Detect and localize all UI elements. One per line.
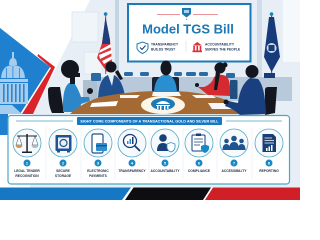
component 3: electronic payments: [84, 129, 112, 178]
component 2: secure storage: 2: [62, 160, 65, 166]
title: Model TGS Bill: [142, 22, 234, 36]
red chevron stripe: [22, 54, 55, 114]
component 5: accountability: ACCOUNTABILITY: [150, 169, 180, 173]
American flag: [97, 12, 112, 74]
component 1: legal tender recognition: [13, 129, 41, 178]
component 6: compliance: [185, 129, 213, 173]
component 5: accountability: 5: [164, 160, 167, 166]
accountability item: ACCOUNTABILITY: [205, 43, 235, 47]
component 4: transparency: [118, 129, 146, 173]
component 1: legal tender recognition: 1: [26, 160, 29, 166]
person: man in navy, left: [98, 62, 125, 102]
component 8: reporting: 8: [268, 160, 271, 166]
component 2: secure storage: STORAGE: [55, 174, 72, 178]
components panel: [8, 116, 290, 184]
component 7: accessibility: 7: [233, 160, 236, 166]
component 2: secure storage: [49, 129, 77, 178]
transparency item: BUILDS TRUST: [151, 48, 175, 52]
component 7: accessibility: [220, 129, 248, 173]
panel heading: EIGHT CORE COMPONENTS OF A TRANSACTIONAL GOLD AND SILVER BILL: [80, 119, 219, 124]
person: woman in red: [195, 62, 238, 99]
person: woman in blue, centre: [152, 60, 179, 92]
chairs: [91, 72, 235, 81]
room background: [0, 0, 300, 200]
component 6: compliance: COMPLIANCE: [188, 169, 211, 173]
conference table: [70, 91, 253, 114]
component 3: electronic payments: PAYMENTS: [89, 174, 108, 178]
capitol building: [0, 52, 28, 114]
person: man in navy, right: [224, 65, 277, 115]
person: woman in blue, left: [48, 60, 93, 113]
component 7: accessibility: ACCESSIBILITY: [221, 169, 247, 173]
component 4: transparency: 4: [131, 160, 134, 166]
capitol diamond: [0, 28, 55, 135]
component 5: accountability: [150, 129, 180, 173]
table seal: [141, 96, 185, 114]
transparency item: TRANSPARENCY: [151, 43, 179, 47]
bottom bands: [0, 188, 300, 200]
component 3: electronic payments: ELECTRONIC: [87, 169, 109, 173]
dividers: [46, 128, 252, 179]
component 8: reporting: [255, 129, 283, 173]
emblem: [157, 8, 218, 20]
component 2: secure storage: SECURE: [56, 169, 71, 173]
accountability item: SERVES THE PEOPLE: [205, 48, 241, 52]
component 6: compliance: 6: [198, 160, 201, 166]
component 4: transparency: TRANSPARENCY: [118, 169, 146, 173]
component 1: legal tender recognition: LEGAL TENDER: [14, 169, 40, 173]
title board: [128, 4, 250, 62]
transparency item: [137, 42, 179, 54]
panel heading: [77, 117, 222, 125]
blue state flag: [264, 12, 280, 78]
component 8: reporting: REPORTING: [259, 169, 279, 173]
component 3: electronic payments: 3: [97, 160, 100, 166]
accountability item: [192, 42, 241, 52]
component 1: legal tender recognition: RECOGNITION: [15, 174, 39, 178]
